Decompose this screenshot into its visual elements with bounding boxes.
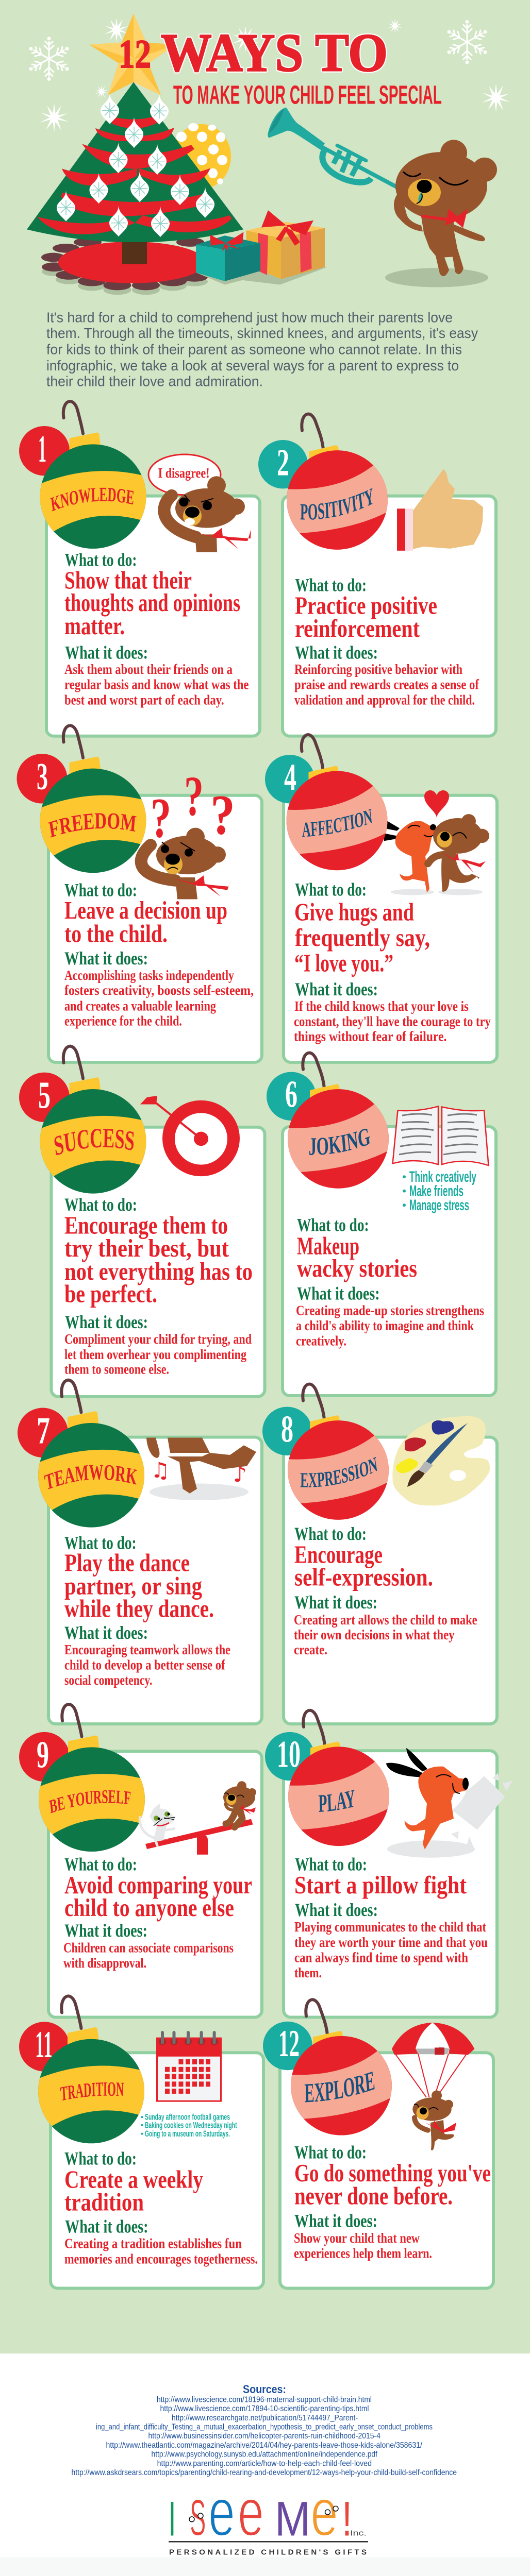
text: what to do: self-expression. <box>294 1564 433 1591</box>
number 9: 9 <box>37 1734 49 1776</box>
bear arms <box>394 194 485 241</box>
polka-dot bauble <box>172 123 231 189</box>
text: what it does: them to someone else. <box>64 1362 169 1378</box>
tagline: PERSONALIZED CHILDREN'S GIFTS <box>169 2549 367 2557</box>
ornament: affection <box>287 733 388 871</box>
number 8 <box>262 1407 312 1455</box>
text: what to do: be perfect. <box>64 1280 157 1308</box>
number 5: 5 <box>38 1075 51 1116</box>
panel: 7 teamwork <box>18 1379 263 1726</box>
number 11: 11 <box>35 2024 53 2066</box>
text: what it does: Ask them about their friends on a <box>64 662 233 677</box>
text: what to do: to the child. <box>64 920 168 947</box>
icon: calendar <box>156 2032 222 2101</box>
text: what it does: Children can associate comparisons <box>63 1940 234 1956</box>
text: what it does: Playing communicates to the child that <box>294 1919 487 1935</box>
icon: question marks <box>151 765 235 850</box>
text: what it does: they are worth your time and that you <box>294 1935 488 1951</box>
panel: 4 affection <box>265 733 499 1064</box>
text: what it does: Creating art allows the child to make <box>294 1612 477 1628</box>
bear head <box>395 140 497 220</box>
text: what it does: creatively. <box>296 1333 346 1349</box>
text: what it does: What it does: <box>65 1311 148 1332</box>
text: what to do: What to do: <box>65 549 137 570</box>
text: what it does: fosters creativity, boosts self-esteem, <box>64 982 254 998</box>
text: what to do: Create a weekly <box>64 2166 203 2193</box>
text: what to do: matter. <box>64 612 125 640</box>
ornament: explore <box>291 1998 392 2135</box>
sources <box>71 2382 457 2477</box>
text: what it does <box>64 1311 252 1378</box>
panel: 2 positivity <box>258 412 498 738</box>
ornament: affection: AFFECTION <box>302 809 372 837</box>
icon: hugging dog and bear <box>384 814 489 895</box>
text: what to do: Play the dance <box>64 1549 190 1577</box>
icon: parachute bear <box>392 2023 474 2150</box>
panel: 1 knowledge <box>19 400 261 738</box>
text: what it does <box>294 642 479 708</box>
bullet list: Sunday afternoon football games <box>145 2112 230 2122</box>
icon: thumbs up <box>397 469 483 551</box>
text: what it does: Creating made-up stories strengthens <box>296 1303 484 1319</box>
text: what it does <box>296 1283 484 1349</box>
icon: question marks: ? <box>151 787 171 850</box>
ornament: be yourself <box>39 1703 145 1852</box>
text: what it does: memories and encourages togetherness. <box>64 2251 258 2267</box>
number 6: 6 <box>285 1074 297 1115</box>
number 9 <box>19 1732 70 1782</box>
white tree ornaments <box>57 93 214 237</box>
ornament: success <box>40 1045 146 1194</box>
text: what to do <box>64 549 240 640</box>
icon: dancing legs and notes: ♫ <box>151 1458 170 1483</box>
illustration: bear with trumpet <box>268 107 497 287</box>
bullet list: Going to a museum on Saturdays. <box>145 2129 230 2139</box>
text: what to do: never done before. <box>294 2182 453 2210</box>
bullet list <box>141 2112 237 2139</box>
sources: http://www.askdrsears.com/topics/parenting/child-rearing-and-development/12-ways-help-your-child-build-self-confidence <box>71 2468 457 2477</box>
icon: dog with pillow <box>386 1748 513 1858</box>
ornament: positivity: POSITIVITY <box>300 488 372 520</box>
number 3: 3 <box>37 756 48 798</box>
text: what it does <box>64 1622 230 1688</box>
text: what to do: Encourage them to <box>64 1212 228 1239</box>
ornament: tradition <box>38 1994 144 2143</box>
text: what to do: Avoid comparing your <box>64 1871 252 1899</box>
text: what to do <box>64 2148 203 2216</box>
icon: dancing legs and notes: ♪ <box>233 1462 247 1487</box>
text: what it does: What it does: <box>294 1591 377 1613</box>
panel: 12 explore <box>263 1998 495 2290</box>
number 7: 7 <box>37 1410 50 1452</box>
text: what it does: Accomplishing tasks independently <box>64 968 234 984</box>
number 8: 8 <box>281 1409 293 1450</box>
text: what to do: “I love you.” <box>294 950 393 977</box>
text: what to do <box>294 2142 491 2210</box>
logo: I see Me!: I <box>169 2492 176 2546</box>
text: what to do: Start a pillow fight <box>294 1871 467 1899</box>
title: 12 <box>119 31 151 77</box>
ornament: play: PLAY <box>319 1790 355 1812</box>
teal gift <box>196 232 260 281</box>
text: what it does <box>64 947 254 1029</box>
trunk <box>122 242 147 264</box>
ornament: joking: JOKING <box>309 1128 370 1155</box>
text: what to do: Practice positive <box>295 592 437 620</box>
text: what it does: Encouraging teamwork allows the <box>64 1642 230 1658</box>
ornament: freedom: FREEDOM <box>48 813 137 838</box>
text: what to do: Give hugs and <box>294 899 414 926</box>
logo: I see Me!: Inc. <box>350 2529 367 2537</box>
sources: http://www.psychology.sunysb.edu/attachment/online/independence.pdf <box>152 2450 378 2459</box>
red garlands <box>37 115 231 234</box>
bow tie <box>421 209 468 228</box>
text: what to do <box>294 1523 433 1591</box>
intro text: It's hard for a child to comprehend just how much their parents love <box>46 310 453 325</box>
intro text: them. Through all the timeouts, skinned knees, and arguments, it's easy <box>46 325 478 341</box>
text: what it does: with disapproval. <box>63 1955 146 1971</box>
bullet list: Manage stress <box>409 1197 469 1214</box>
ornament: teamwork: TEAMWORK <box>44 1465 137 1489</box>
text: what it does: What it does: <box>65 642 148 663</box>
ornament: play <box>288 1708 389 1846</box>
ornament: explore: EXPLORE <box>304 2072 375 2102</box>
sources: http://www.theatlantic.com/magazine/archive/2014/04/hey-parents-leave-those-kids-alone/358631/ <box>106 2441 423 2450</box>
text: what it does: What it does: <box>64 1920 147 1941</box>
text: what it does: What it does: <box>295 642 378 663</box>
text: what it does <box>294 2210 432 2261</box>
number 4 <box>265 755 314 803</box>
icon: seesaw with cat and bear <box>140 1781 256 1855</box>
sources: http://www.livescience.com/17894-10-scientific-parenting-tips.html <box>160 2404 369 2413</box>
text: what it does: child to develop a better sense of <box>64 1657 225 1673</box>
logo: I see Me! <box>169 2475 368 2550</box>
icon: dancing legs and notes <box>146 1438 256 1500</box>
text: what to do: try their best, but <box>64 1234 229 1262</box>
text: what to do: reinforcement <box>295 615 420 642</box>
ornament: expression <box>288 1383 389 1520</box>
intro text <box>46 310 478 389</box>
text: what it does: praise and rewards creates a sense of <box>294 676 479 692</box>
text: what to do: What to do: <box>295 879 367 900</box>
ornament: freedom <box>40 724 146 873</box>
text: what it does: Reinforcing positive behavior with <box>294 662 462 677</box>
number 10 <box>265 1732 314 1781</box>
text: what it does: experiences help them learn. <box>294 2246 432 2261</box>
ornament: teamwork <box>38 1379 144 1528</box>
number 11 <box>19 2022 70 2072</box>
text: what to do <box>297 1214 417 1282</box>
text: what to do <box>64 879 227 947</box>
number 3 <box>16 754 67 803</box>
number 7 <box>18 1408 68 1458</box>
text: what it does: best and worst part of each day. <box>64 692 224 708</box>
text: what it does <box>64 2216 258 2267</box>
number 2: 2 <box>277 442 289 484</box>
number 6 <box>267 1072 316 1121</box>
text: what to do <box>294 1854 467 1899</box>
text: what it does: What it does: <box>64 947 148 969</box>
bullet list: Think creatively <box>409 1168 476 1185</box>
ornament: positivity <box>287 412 388 550</box>
text: what to do: child to anyone else <box>64 1894 234 1922</box>
text: what it does: Creating a tradition establishes fun <box>64 2236 242 2251</box>
panel: 11 tradition <box>19 1994 265 2290</box>
logo: I see Me!: e <box>310 2475 338 2550</box>
logo: I see Me!: s <box>190 2475 206 2550</box>
text: what to do <box>64 1194 253 1308</box>
text: what to do: thoughts and opinions <box>64 589 240 617</box>
text: what it does <box>294 1899 488 1981</box>
bullet list: Baking cookies on Wednesday night <box>145 2121 237 2130</box>
number 12 <box>263 2022 312 2070</box>
text: what to do: tradition <box>64 2189 144 2216</box>
number 10: 10 <box>277 1734 301 1776</box>
icon: question marks: ? <box>210 784 235 846</box>
text: what to do: What to do: <box>64 2148 137 2169</box>
text: what to do <box>294 879 430 977</box>
panel: 8 expression <box>262 1383 499 1726</box>
illustration: christmas tree <box>27 14 243 295</box>
title: WAYS TO <box>161 22 388 82</box>
ornament: expression: EXPRESSION <box>300 1457 377 1487</box>
bear body <box>421 216 463 276</box>
text: what to do: What to do: <box>295 1854 367 1874</box>
text: what to do: not everything has to <box>64 1258 253 1285</box>
trumpet <box>268 107 417 197</box>
yellow gift <box>246 210 325 279</box>
text: what it does: Compliment your child for trying, and <box>64 1331 252 1347</box>
text: what to do: What to do: <box>294 1523 367 1544</box>
text: what to do: Show that their <box>64 567 192 594</box>
text: what to do <box>295 574 437 642</box>
logo: I see Me!: e <box>208 2475 235 2550</box>
logo: I see Me!: e <box>238 2475 264 2550</box>
text: what it does: a child's ability to imagine and think <box>296 1318 474 1334</box>
text: what to do: What to do: <box>294 2142 367 2163</box>
icon: question marks: ? <box>184 765 204 828</box>
text: what it does: and creates a valuable learning <box>64 998 216 1014</box>
number 1: 1 <box>38 428 46 470</box>
panel: 10 play <box>265 1708 513 2019</box>
text: what it does <box>294 1591 477 1658</box>
panel: 6 joking <box>267 1051 498 1397</box>
text: what to do: while they dance. <box>64 1595 214 1623</box>
text: what to do: Makeup <box>297 1232 359 1260</box>
text: what to do: What to do: <box>295 574 367 595</box>
icon: puzzled bear <box>141 828 231 899</box>
intro text: infographic, we take a look at several ways for a parent to express to <box>46 358 459 374</box>
title: WAYS TO <box>161 22 388 82</box>
intro text: their child their love and admiration. <box>46 373 263 389</box>
logo: I see Me!: M <box>275 2492 310 2546</box>
text: what it does: them. <box>294 1965 322 1981</box>
speech bubble <box>148 454 221 495</box>
bullet list <box>403 1168 476 1214</box>
snowflakes and sparkles <box>29 18 510 132</box>
sources: http://www.businessinsider.com/helicopter-parents-ruin-childhood-2015-4 <box>148 2432 380 2441</box>
sources: http://www.livescience.com/18196-maternal-support-child-brain.html <box>157 2396 372 2404</box>
text: what it does: regular basis and know what was the <box>64 676 249 692</box>
text: what it does: can always find time to spend with <box>294 1950 468 1965</box>
text: what it does: What it does: <box>295 1899 378 1920</box>
text: what it does: social competency. <box>64 1672 152 1688</box>
sources: ing_and_infant_difficulty_Testing_a_mutual_exacerbation_hypothesis_to_predict_early_onset_conduct_problems <box>96 2423 433 2432</box>
text: what it does: create. <box>294 1642 327 1658</box>
logo: I see Me!: ! <box>342 2492 352 2546</box>
icon: open book <box>393 1106 489 1165</box>
ornament: success: SUCCESS <box>55 1129 134 1155</box>
text: what it does <box>294 978 491 1045</box>
icon: target and arrow <box>140 1096 240 1176</box>
text: what it does: Show your child that new <box>294 2230 420 2246</box>
text: what it does: If the child knows that your love is <box>294 998 469 1014</box>
number 5 <box>19 1073 70 1122</box>
text: what to do <box>64 1532 214 1623</box>
number 1 <box>19 426 70 476</box>
text: what it does: things without fear of failure. <box>294 1029 446 1045</box>
text: what to do <box>64 1854 252 1922</box>
ornament: knowledge <box>40 400 146 549</box>
panel: 5 success <box>19 1045 266 1398</box>
text: what to do: Leave a decision up <box>64 897 227 924</box>
text: what to do: frequently say, <box>295 924 430 952</box>
text: what it does: validation and approval for the child. <box>294 692 475 708</box>
ornament: knowledge: KNOWLEDGE <box>51 487 134 511</box>
bullet list: Make friends <box>409 1183 463 1199</box>
text: what it does: What it does: <box>294 2210 377 2231</box>
sources: http://www.parenting.com/article/how-to-help-each-child-feel-loved <box>157 2459 372 2468</box>
text: what to do: What to do: <box>64 1532 137 1553</box>
text: what it does: constant, they'll have the courage to try <box>294 1014 491 1030</box>
text: what it does <box>63 1920 234 1971</box>
icon: heart <box>424 790 449 818</box>
panel: 3 freedom <box>16 724 263 1064</box>
tree skirt <box>41 238 208 295</box>
speech bubble: I disagree! <box>158 465 210 481</box>
text: what to do: What to do: <box>64 1194 137 1215</box>
ornament: tradition: TRADITION <box>60 2082 124 2100</box>
text: what it does: their own decisions in what they <box>294 1627 455 1643</box>
text: what to do: partner, or sing <box>64 1572 202 1600</box>
text: what it does <box>64 642 249 708</box>
text: what to do: What to do: <box>297 1214 369 1235</box>
icon: angry bear <box>164 476 251 552</box>
text: what it does: What it does: <box>64 1622 148 1643</box>
ornament: joking <box>288 1051 389 1189</box>
text: what it does: What it does: <box>65 2216 148 2236</box>
text: what to do: wacky stories <box>297 1255 417 1282</box>
text: what to do: What to do: <box>64 1854 137 1874</box>
illustration: gifts <box>196 210 326 285</box>
sources: Sources: <box>243 2382 286 2396</box>
text: what it does: What it does: <box>295 978 378 999</box>
ornament: be yourself: BE YOURSELF <box>49 1790 131 1814</box>
gold star <box>89 14 176 95</box>
tree body <box>27 82 243 243</box>
sources: http://www.researchgate.net/publication/51744497_Parent- <box>172 2414 358 2422</box>
icon: art palette <box>392 1416 490 1505</box>
number 12: 12 <box>278 2023 300 2065</box>
number 2 <box>258 440 308 488</box>
panel: 9 be yourself <box>19 1703 263 2019</box>
text: what it does: experience for the child. <box>64 1013 182 1029</box>
text: what it does: let them overhear you complimenting <box>64 1347 246 1363</box>
intro text: for kids to think of their parent as someone who cannot relate. In this <box>46 342 462 357</box>
text: what to do: Encourage <box>294 1541 383 1569</box>
text: what it does: What it does: <box>297 1283 380 1304</box>
number 4: 4 <box>284 756 296 799</box>
text: what to do: What to do: <box>64 879 137 900</box>
